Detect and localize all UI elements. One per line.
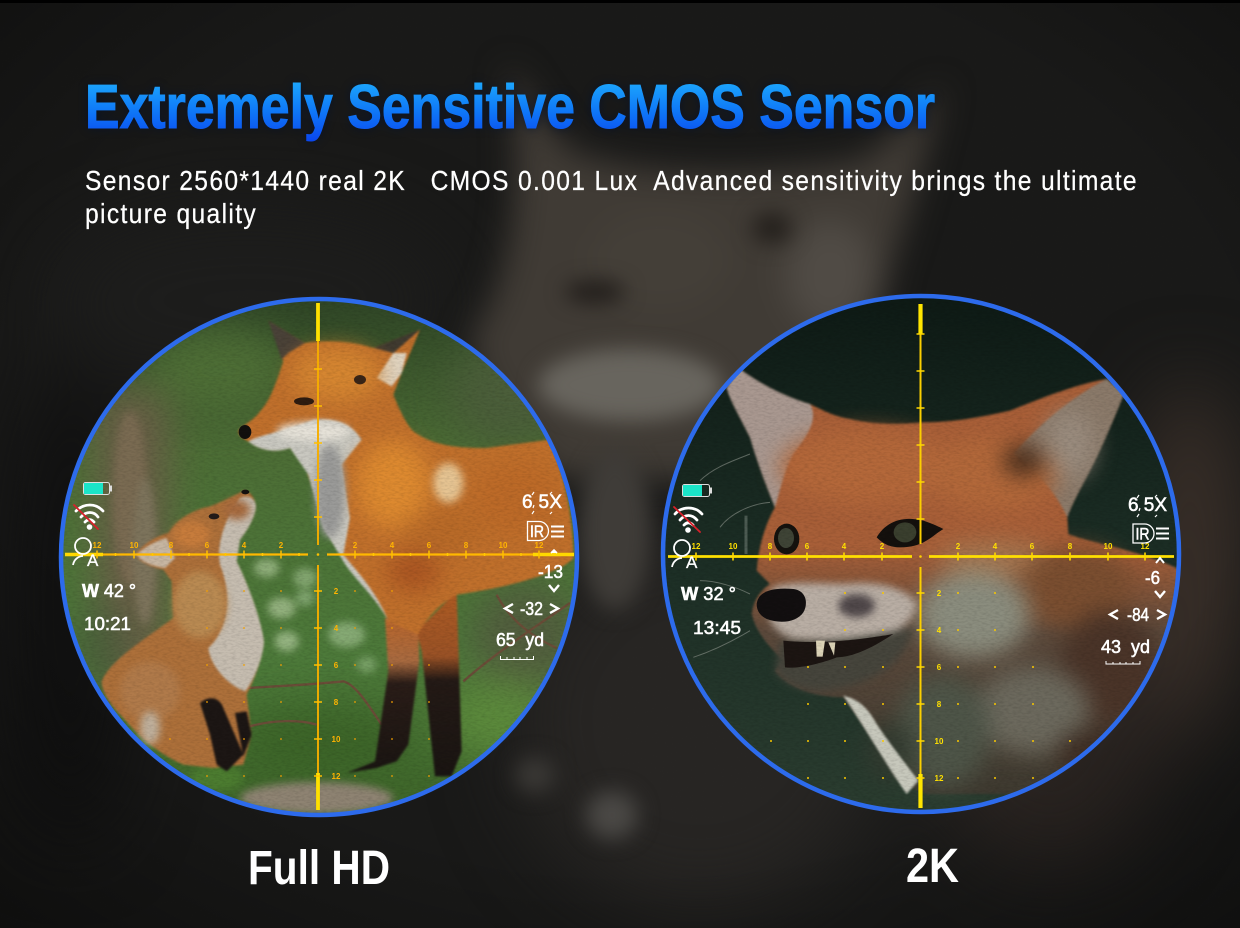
title: Extremely Sensitive CMOS Sensor	[85, 73, 935, 142]
reticle: 4	[993, 542, 998, 551]
icon: IR and menu: IR	[530, 522, 544, 541]
reticle: 10	[729, 542, 738, 551]
reticle: 12	[1141, 542, 1150, 551]
elevation adjustment	[538, 550, 563, 591]
reticle: 6	[937, 663, 942, 672]
subtitle text block: picture quality	[85, 198, 256, 229]
elevation adjustment: -6	[1145, 568, 1160, 588]
zoom level: 6 5X	[1128, 495, 1167, 516]
clock: 13:45	[693, 618, 741, 638]
photo: fox face close-up	[660, 294, 1182, 816]
adult fox	[238, 321, 573, 776]
subtitle text block	[85, 165, 1137, 229]
reticle: 12	[332, 772, 341, 781]
subtitle text block: Sensor 2560*1440 real 2K CMOS 0.001 Lux Advanced sensitivity brings the ultimate	[85, 165, 1137, 196]
windage adjustment	[1110, 605, 1165, 625]
reticle: 8	[334, 698, 339, 707]
label: 2K: 2K	[906, 840, 959, 893]
icon: IR and menu	[528, 522, 564, 541]
range reading: 65 yd	[496, 630, 544, 650]
reticle: 8	[768, 542, 773, 551]
reticle: 8	[464, 541, 469, 550]
icon: person auto: A	[87, 551, 99, 570]
fox eyes, nose and mouth	[757, 519, 943, 668]
fox kit	[102, 491, 264, 771]
reticle: 12	[535, 541, 544, 550]
reticle: 6	[205, 541, 210, 550]
range reading: 43 yd	[1101, 637, 1150, 657]
windage adjustment: -84	[1127, 605, 1149, 625]
wind reading: W 32 °	[681, 584, 736, 604]
icon: wifi off	[674, 507, 702, 533]
reticle: 10	[130, 541, 139, 550]
reticle: 2	[956, 542, 961, 551]
windage adjustment	[505, 599, 558, 619]
reticle: 12	[692, 542, 701, 551]
icon: wifi off	[74, 505, 103, 530]
windage adjustment: -32	[520, 599, 543, 619]
title: Extremely Sensitive CMOS Sensor	[85, 73, 935, 142]
icon: person auto	[672, 540, 698, 572]
reticle: 2	[334, 587, 339, 596]
reticle: 8	[937, 700, 942, 709]
icon: battery	[84, 482, 112, 494]
reticle: 4	[390, 541, 395, 550]
icon: person auto: A	[686, 553, 698, 572]
icon: person auto	[73, 538, 99, 570]
zoom level: 6 5X	[522, 492, 562, 513]
range reading	[496, 630, 544, 660]
reticle: 8	[1068, 542, 1073, 551]
reticle: 4	[242, 541, 247, 550]
elevation adjustment	[1145, 558, 1165, 597]
reticle: 2	[353, 541, 358, 550]
panel: Full HD scope view	[60, 298, 583, 818]
reticle: 6	[334, 661, 339, 670]
icon: IR and menu: IR	[1136, 524, 1150, 544]
reticle	[65, 303, 574, 810]
photo: adult fox and kit	[60, 298, 583, 818]
clock: 10:21	[84, 614, 131, 634]
reticle	[668, 304, 1174, 808]
reticle: 10	[935, 737, 944, 746]
scope ring	[61, 299, 577, 815]
reticle: 6	[1030, 542, 1035, 551]
reticle: 4	[334, 624, 339, 633]
panel: 2K scope view	[660, 294, 1182, 816]
reticle: 12	[935, 774, 944, 783]
reticle: 6	[805, 542, 810, 551]
scope ring	[663, 296, 1179, 812]
reticle: 4	[937, 626, 942, 635]
reticle: 12	[93, 541, 102, 550]
wind reading: W 42 °	[82, 581, 136, 601]
reticle: 10	[499, 541, 508, 550]
elevation adjustment: -13	[538, 562, 563, 582]
icon: battery	[682, 484, 712, 496]
reticle: 10	[1104, 542, 1113, 551]
reticle: 2	[279, 541, 284, 550]
reticle: 4	[842, 542, 847, 551]
label: Full HD: Full HD	[248, 842, 390, 895]
icon: IR and menu	[1133, 524, 1169, 544]
reticle: 2	[937, 589, 942, 598]
reticle: 8	[169, 541, 174, 550]
reticle: 2	[880, 542, 885, 551]
reticle: 10	[332, 735, 341, 744]
reticle: 6	[427, 541, 432, 550]
